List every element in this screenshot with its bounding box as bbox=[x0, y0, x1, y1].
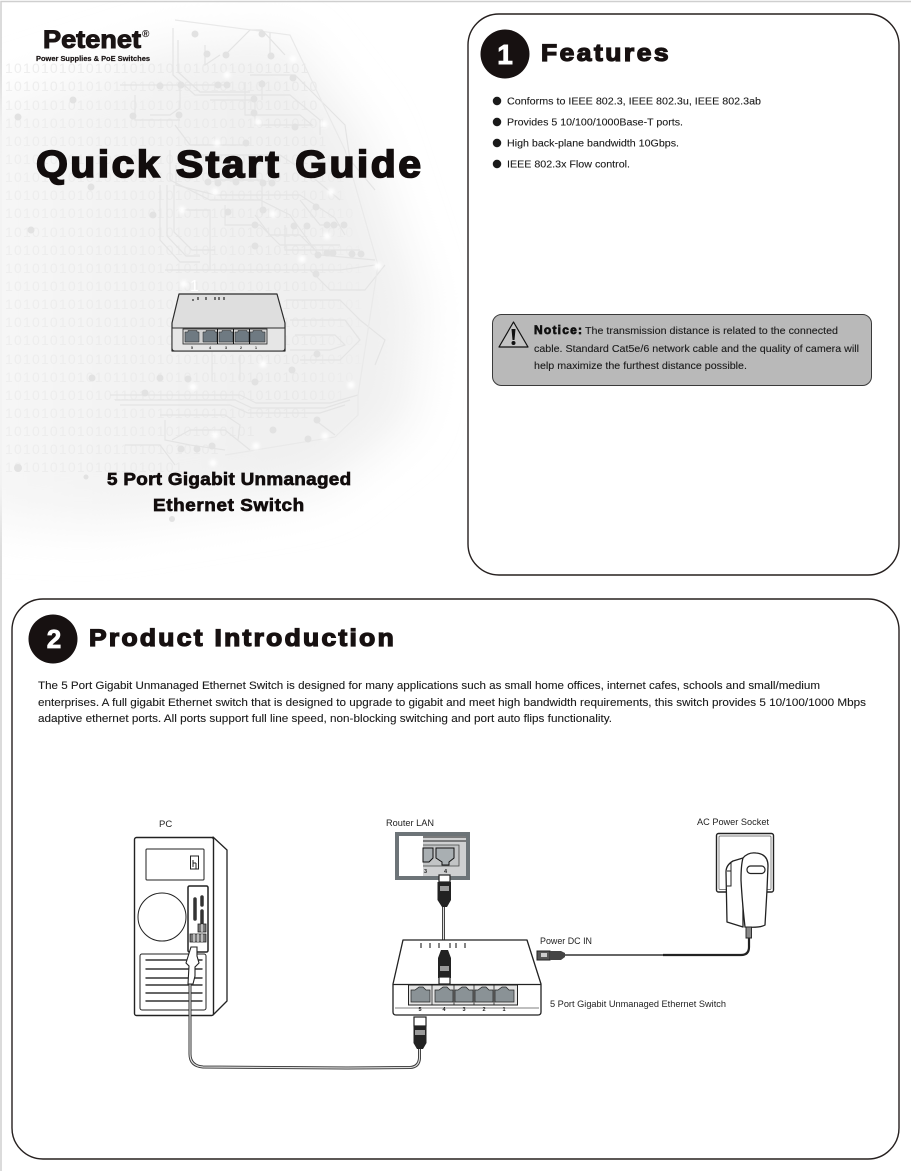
cover background: circuit board pattern: 10101010101011010101010101010101010101 bbox=[5, 387, 345, 403]
callout: notice bbox=[492, 314, 872, 386]
intro text bbox=[38, 680, 867, 725]
cover background: circuit board pattern: 10101010101011010101010101010101010 bbox=[5, 78, 318, 94]
cover background: circuit board pattern: 101010101010110101010101 bbox=[5, 441, 220, 457]
icon: section number 1 bbox=[480, 30, 530, 78]
icon: section number 2 bbox=[28, 614, 78, 664]
icon: DC connector bbox=[537, 951, 565, 960]
cover background: circuit board pattern: 101010101010110101010101010101010101010 bbox=[5, 224, 354, 240]
panel: product introduction bbox=[12, 599, 899, 1159]
diagram: switch: 4 bbox=[442, 1007, 446, 1013]
diagram: router LAN: Router LAN bbox=[386, 818, 434, 829]
intro text: The 5 Port Gigabit Unmanaged Ethernet Switch is designed for many applications such as small home offices, internet cafes, schools and small/medium bbox=[38, 680, 820, 692]
cover background: circuit board pattern bbox=[0, 20, 420, 525]
subtitle: product name: Ethernet Switch bbox=[153, 494, 304, 515]
cover background: circuit board pattern: 101010101010110101010101010101010101 bbox=[5, 133, 327, 149]
subtitle: product name: 5 Port Gigabit Unmanaged bbox=[107, 468, 351, 489]
cover background: circuit board pattern: 1010101010101101010101010101010101010101 bbox=[5, 314, 363, 330]
diagram: AC power socket and adapter: AC Power Socket bbox=[697, 817, 769, 828]
illustration: 5-port switch: 4 bbox=[209, 345, 212, 350]
diagram: router cable bbox=[438, 875, 451, 955]
cover background: circuit board pattern: 1 bbox=[190, 278, 199, 295]
feature list bbox=[493, 96, 761, 170]
intro text: adaptive ethernet ports. All ports support full line speed, non-blocking switching and port auto flips functionality. bbox=[38, 713, 612, 725]
cover background: circuit board pattern: 10101010101011010101010101010101010101 bbox=[5, 187, 345, 203]
title: Quick Start Guide: Quick Start Guide bbox=[36, 143, 421, 186]
label: switch name: 5 Port Gigabit Unmanaged Ethernet Switch bbox=[550, 999, 726, 1010]
cover background: circuit board pattern: 1010101010101101010101010101010101010 bbox=[5, 151, 336, 167]
diagram: router LAN: 3 bbox=[424, 869, 427, 875]
diagram: switch: 1 bbox=[502, 1007, 506, 1013]
diagram: power cable bbox=[537, 938, 749, 960]
icon: router plug bbox=[438, 875, 451, 907]
icon: switch top plug bbox=[438, 950, 451, 984]
icon: section number 2: 2 bbox=[47, 624, 61, 654]
diagram: router LAN: 4 bbox=[444, 869, 448, 875]
diagram: PC: PC bbox=[159, 819, 172, 830]
diagram: switch: 5 bbox=[418, 1007, 422, 1013]
cover background: circuit board pattern: 1010101010101101010101010101010101010101 bbox=[5, 260, 363, 276]
heading: Product Introduction: Product Introduction bbox=[89, 625, 394, 652]
callout: notice: The transmission distance is related to the connected bbox=[585, 325, 838, 337]
cover background: circuit board pattern: 1010101010101101010101010101010101010101 bbox=[5, 332, 363, 348]
feature list: IEEE 802.3x Flow control. bbox=[507, 158, 630, 170]
heading: Features: Features bbox=[541, 40, 669, 67]
callout: notice: Notice: bbox=[534, 323, 582, 337]
cover background: circuit board pattern: 1010101010101101010101010101010101010101 bbox=[5, 278, 363, 294]
intro text: enterprises. A full gigabit Ethernet switch that is designed to upgrade to gigabit and meet high bandwidth requirements, this switch provides 5 10/100/1000 Mbps bbox=[38, 697, 867, 709]
cover background: circuit board pattern: 1010101010101101010101010101010101 bbox=[5, 60, 310, 76]
callout: notice: help maximize the furthest distance possible. bbox=[534, 360, 747, 372]
illustration: 5-port switch: 2 bbox=[240, 345, 243, 350]
callout: notice: cable. Standard Cat5e/6 network cable and the quality of camera will bbox=[534, 343, 859, 355]
cover background: circuit board pattern: 10101010101011010101 bbox=[5, 459, 184, 475]
illustration: 5-port switch bbox=[172, 294, 285, 351]
feature list: Provides 5 10/100/1000Base-T ports. bbox=[507, 116, 683, 128]
cover background: circuit board pattern: 1010101010101101010101010101010101010101 bbox=[5, 351, 363, 367]
panel: features bbox=[468, 14, 899, 575]
illustration: 5-port switch: 5 bbox=[191, 345, 194, 350]
label: Power DC IN: Power DC IN bbox=[540, 936, 592, 947]
diagram: AC power socket and adapter bbox=[697, 817, 774, 938]
icon: lower switch plug bbox=[414, 1017, 426, 1049]
icon: PC-side plug bbox=[186, 947, 199, 984]
cover background: circuit board pattern: 1010101010101101010101010101010101010101 bbox=[5, 242, 363, 258]
diagram: switch bbox=[393, 940, 541, 1015]
diagram: PC bbox=[134, 819, 227, 1016]
cover background: circuit board pattern: 1010101010101101010101010101010101 bbox=[5, 405, 310, 421]
feature list: Conforms to IEEE 802.3, IEEE 802.3u, IEEE 802.3ab bbox=[507, 96, 761, 108]
cover background: circuit board pattern: 101010101010110101010101010101010101 bbox=[5, 115, 327, 131]
illustration: 5-port switch: 3 bbox=[225, 345, 228, 350]
logo: Petenet: Power Supplies & PoE Switches bbox=[36, 54, 150, 63]
subtitle: product name bbox=[107, 468, 351, 515]
cover background: circuit board pattern: 10101010101011010101010101010101010 bbox=[5, 97, 318, 113]
cover background: circuit board pattern: 101010101010110101010101010101010101010 bbox=[5, 369, 354, 385]
illustration: 5-port switch: 1 bbox=[255, 345, 258, 350]
icon: warning triangle bbox=[499, 322, 528, 347]
diagram: switch: 2 bbox=[482, 1007, 486, 1013]
cover background: circuit board pattern: 101010101010110101010101010101010101010 bbox=[5, 205, 354, 221]
logo: Petenet bbox=[36, 26, 150, 63]
icon: section number 1: 1 bbox=[497, 39, 513, 70]
logo: Petenet: ® bbox=[142, 29, 150, 40]
diagram: network cable PC to switch bbox=[186, 947, 420, 1068]
diagram: router LAN bbox=[386, 818, 468, 878]
feature list: High back-plane bandwidth 10Gbps. bbox=[507, 138, 679, 150]
cover background: circuit board pattern: 10101010101011010101010101010101010101 bbox=[5, 169, 345, 185]
logo: Petenet: Petenet bbox=[43, 26, 142, 54]
diagram: switch: 3 bbox=[462, 1007, 466, 1013]
cover background: circuit board pattern: 1010101010101101010101010101010101010101 bbox=[5, 296, 363, 312]
cover background: circuit board pattern: 1010101010101101010101010101 bbox=[5, 423, 256, 439]
